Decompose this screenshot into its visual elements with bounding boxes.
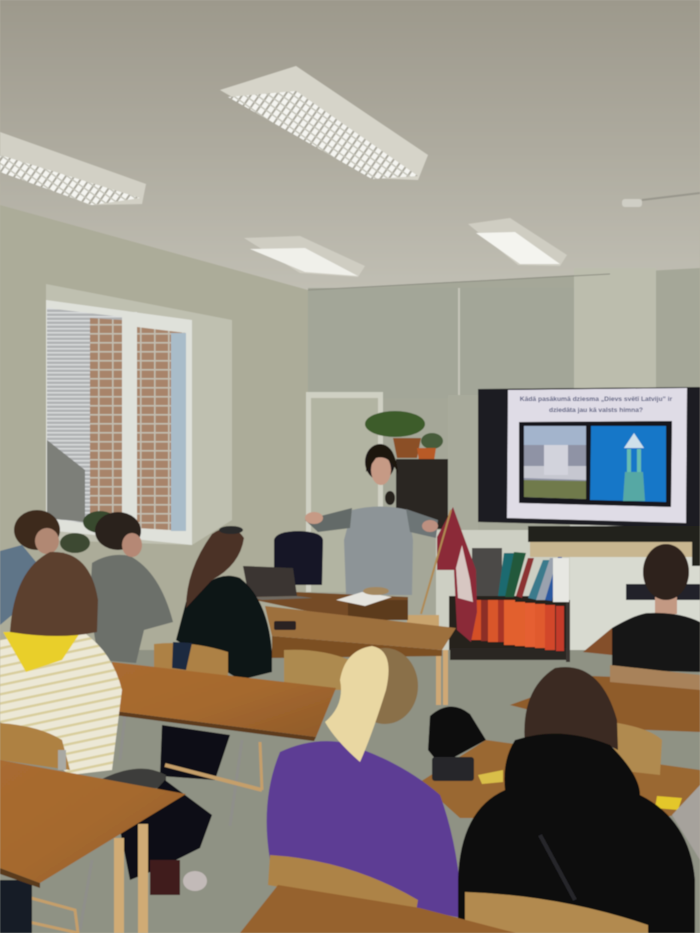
slide image frame	[519, 421, 672, 507]
bottom centre desk	[240, 885, 516, 933]
student: boy in black tee	[612, 544, 700, 672]
slide photo: freedom monument	[590, 426, 666, 502]
student: girl in black jacket	[176, 526, 272, 680]
desk second row	[112, 662, 336, 826]
desk front left	[0, 760, 186, 933]
ceiling light 3	[244, 236, 365, 277]
student: blue shirt boy	[0, 510, 60, 625]
ceiling	[0, 0, 700, 300]
dark trousers and bag	[100, 769, 212, 895]
stand	[530, 541, 692, 557]
floor	[0, 650, 700, 933]
ceiling light 4	[468, 218, 567, 266]
slide photo: monument	[524, 426, 586, 499]
student: girl in purple sweater	[267, 646, 462, 918]
ceiling light 1	[220, 66, 428, 180]
door	[306, 392, 383, 592]
chair front center	[268, 855, 418, 912]
student: far right grey sleeve	[672, 785, 700, 860]
television with slide	[478, 387, 700, 566]
chair right	[610, 665, 700, 690]
backpack	[428, 706, 486, 765]
phone on middle desk	[274, 621, 296, 630]
television with slide: dziedāta jau kā valsts himna?	[549, 407, 643, 414]
flag of Latvia	[407, 507, 477, 642]
slide question: Kādā pasākumā dziesma „Dievs svētī Latviju” ir	[520, 396, 673, 403]
middle back desk	[265, 606, 456, 705]
student: grey sweater boy	[91, 512, 173, 663]
notebook and beads on desk	[336, 587, 392, 606]
dark legs under second desk	[160, 725, 230, 780]
student: black hoodie	[458, 667, 695, 933]
black chair	[274, 531, 323, 585]
front right desk	[420, 722, 700, 818]
window plant	[60, 511, 117, 553]
dress	[344, 506, 413, 595]
laptop	[243, 566, 313, 600]
orange binders	[471, 600, 564, 651]
chairs second row	[154, 642, 350, 690]
window	[46, 284, 232, 545]
ceiling light 2	[0, 132, 146, 205]
teacher	[305, 444, 438, 595]
bookshelf	[396, 459, 570, 662]
back and side walls	[0, 205, 700, 670]
smoke detector	[622, 193, 700, 207]
binders top shelf	[498, 552, 569, 602]
back desk	[250, 590, 408, 620]
chair front right	[465, 892, 648, 933]
chair front left	[0, 723, 70, 770]
table far right top	[510, 628, 700, 732]
plant on shelf	[365, 411, 443, 461]
student: girl in cream sweater	[0, 552, 122, 775]
